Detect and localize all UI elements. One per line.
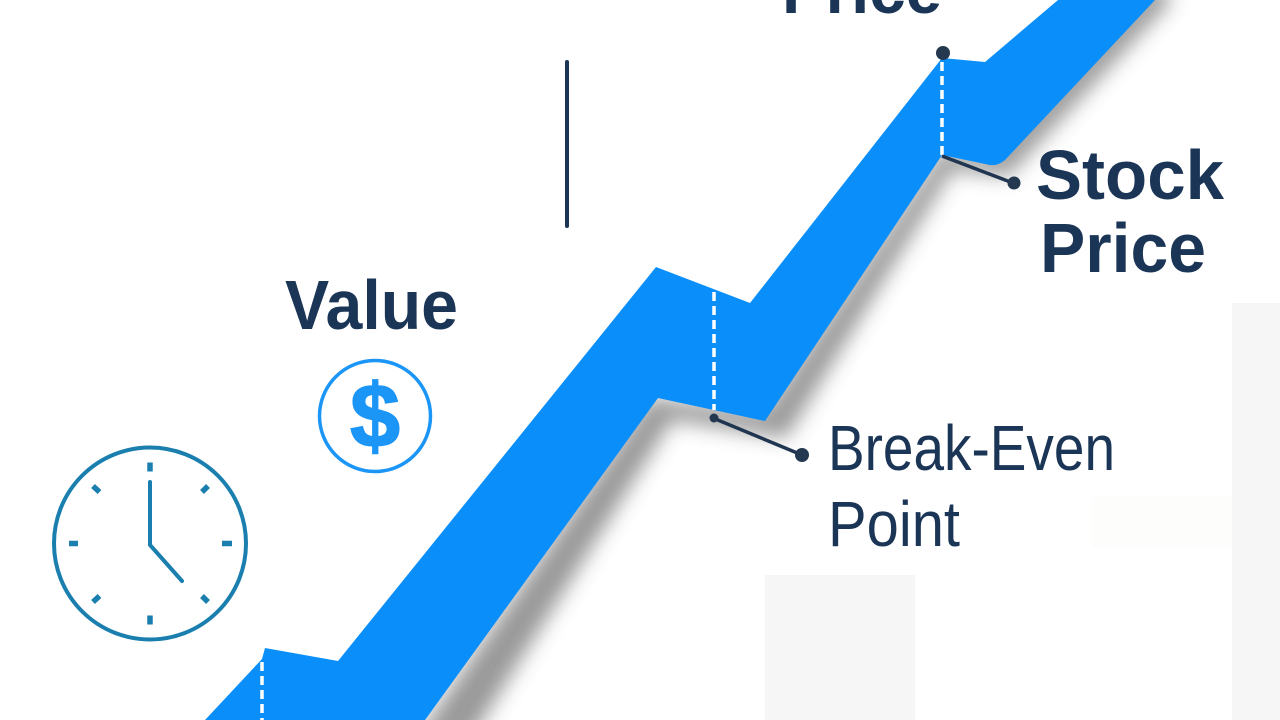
stock price callout [942, 136, 1243, 287]
vertical divider [565, 62, 569, 226]
break-even label: Break-Even [828, 412, 1115, 484]
dashed marker: lower [260, 662, 264, 720]
peak dot [936, 46, 950, 60]
stock price label: Price [1040, 209, 1206, 287]
icon: dollar coin: $ [350, 367, 400, 467]
icon: dollar coin [320, 360, 430, 472]
dashed marker: upper [940, 62, 944, 155]
ribbon shadow [415, 0, 1172, 720]
break-even label: Point [828, 488, 960, 560]
rising price ribbon [205, 0, 1155, 720]
dashed marker: middle [712, 292, 716, 410]
callout leader: stock price [942, 156, 1020, 190]
break-even callout [710, 412, 1133, 560]
icon: clock [54, 448, 246, 640]
callout leader: break-even [710, 414, 809, 462]
value label: Value [285, 266, 458, 344]
background bars [765, 303, 1280, 720]
stock price label: Stock [1036, 136, 1224, 214]
